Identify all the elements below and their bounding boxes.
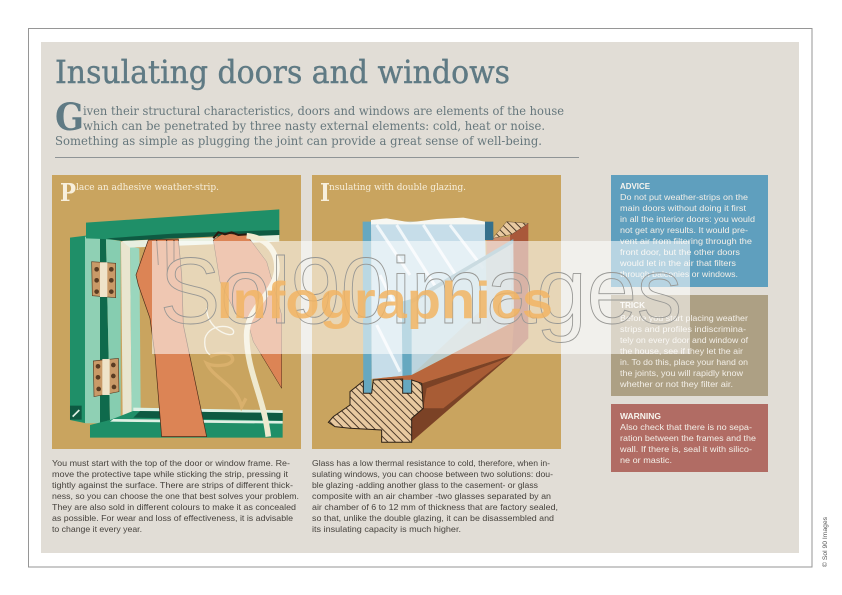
background panel xyxy=(41,42,799,553)
line: ness, so you can choose the one that best solves your problem. xyxy=(52,491,299,501)
illustration: weather strip xyxy=(205,236,277,437)
front glass edge xyxy=(363,222,372,393)
box xyxy=(611,175,768,287)
panel: double glazing xyxy=(312,175,561,449)
credit: © Sol 90 Images xyxy=(821,516,829,567)
intro line 1: iven their structural characteristics, doors and windows are elements of the house xyxy=(83,103,564,118)
panel: weather-strip xyxy=(52,175,301,449)
panel background xyxy=(312,175,561,449)
line: move the protective tape while sticking the strip, pressing it xyxy=(52,469,289,479)
hatched frame profile xyxy=(328,379,423,442)
watermark band xyxy=(152,241,690,354)
line: wall. If there is, seal it with silico- xyxy=(619,444,752,454)
intro line 2: which can be penetrated by three nasty external elements: cold, heat or noise. xyxy=(83,118,545,133)
line: the house, see if they let the air xyxy=(620,346,743,356)
line: through balconies or windows. xyxy=(620,269,738,279)
panel heading: lace an adhesive weather-strip. xyxy=(76,183,219,193)
illustration: right arm xyxy=(213,232,282,388)
line: in. To do this, place your hand on xyxy=(620,357,748,367)
line: Do not put weather-strips on the xyxy=(620,192,748,202)
line: ration between the frames and the xyxy=(620,433,756,443)
box xyxy=(611,295,768,396)
line: whether or not they filter air. xyxy=(619,379,733,389)
line: ne or mastic. xyxy=(620,455,672,465)
line: tightly against the surface. There are strips of different thick- xyxy=(52,480,293,490)
line: main doors without doing it first xyxy=(620,203,747,213)
line: the joints, you will rapidly know xyxy=(620,368,744,378)
line: vent air from filtering through the xyxy=(620,236,752,246)
line: to change it every year. xyxy=(52,524,142,534)
line: ble glazing -adding another glass to the casement- or glass xyxy=(312,480,538,490)
line: Also check that there is no sepa- xyxy=(620,422,752,432)
line: strips and profiles indiscrimina- xyxy=(620,324,746,334)
line: Glass has a low thermal resistance to cold, therefore, when in- xyxy=(312,458,550,468)
line: as possible. For wear and loss of effectiveness, it is advisable xyxy=(52,513,293,523)
box xyxy=(611,404,768,472)
heading: ADVICE xyxy=(620,181,650,191)
panel background xyxy=(52,175,301,449)
line: air chamber of 6 to 12 mm of thickness that are factory sealed, xyxy=(312,502,558,512)
callout: advice xyxy=(611,175,768,287)
body text: weather-strip xyxy=(52,458,299,534)
drop cap G: G xyxy=(55,95,84,139)
line: composite with an air chamber -two glasses separated by an xyxy=(312,491,551,501)
icon: upper hinge xyxy=(92,262,116,298)
intro line 3: Something as simple as plugging the joint can provide a great sense of well-being. xyxy=(55,133,542,148)
callout: warning xyxy=(611,404,768,472)
title: Insulating doors and windows xyxy=(55,53,510,91)
callout: trick xyxy=(611,295,768,396)
line: in all the interior doors: you would xyxy=(620,214,755,224)
illustration: left arm xyxy=(136,239,207,437)
watermark orange text: Infographics xyxy=(217,272,553,330)
heading: TRICK xyxy=(620,300,646,310)
line: so that, unlike the double glazing, it can be disassembled and xyxy=(312,513,554,523)
intro text xyxy=(55,95,564,148)
watermark xyxy=(152,238,690,354)
rear glass edge xyxy=(402,299,412,393)
illustration: window section xyxy=(328,218,528,442)
line: sulating windows, you can choose between two solutions: dou- xyxy=(312,469,553,479)
icon: lower hinge xyxy=(93,358,119,397)
panel heading: nsulating with double glazing. xyxy=(329,183,466,193)
line: not get any results. It would pre- xyxy=(620,225,748,235)
line: front door, but the other doors xyxy=(620,247,740,257)
line: would let in the air that filters xyxy=(619,258,736,268)
line: They are also sold in different colours to make it as concealed xyxy=(52,502,296,512)
body text: double glazing xyxy=(312,458,558,534)
drop cap I: I xyxy=(320,178,330,207)
line: its insulating capacity is much higher. xyxy=(312,524,461,534)
line: Before you start placing weather xyxy=(620,313,748,323)
drop cap P: P xyxy=(60,178,76,207)
line: You must start with the top of the door or window frame. Re- xyxy=(52,458,290,468)
heading: WARNING xyxy=(620,411,661,421)
illustration: door frame and hands xyxy=(70,209,283,438)
watermark outline text: Sol90images xyxy=(160,238,682,343)
line: tely on every door and window of xyxy=(620,335,749,345)
